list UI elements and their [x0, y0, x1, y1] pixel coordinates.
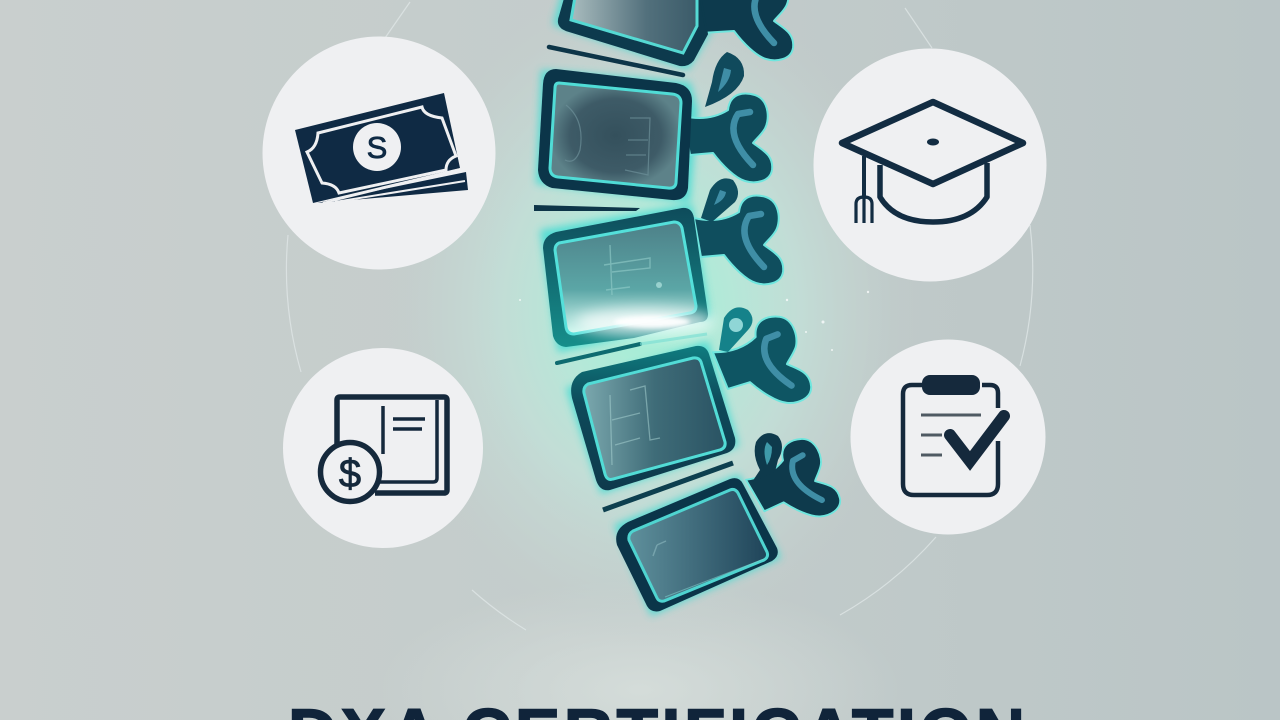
- bright flare: [575, 308, 715, 336]
- orbit ring: [286, 2, 1033, 630]
- vertebra 1: [559, 0, 707, 65]
- icon: book with coin: [320, 397, 447, 502]
- panel: education circle: [814, 48, 1046, 282]
- spine illustration: [519, 0, 869, 616]
- vertebra 4: [571, 346, 735, 490]
- disc line 2: [534, 205, 640, 211]
- drop 4: [719, 307, 752, 352]
- panel: budget book circle: [283, 348, 483, 548]
- vertebra process 5: [739, 432, 844, 537]
- vertebra 2: [538, 69, 692, 200]
- icon: book with coin: $: [339, 452, 361, 496]
- drop 3: [701, 178, 738, 222]
- panel: money circle: [262, 36, 496, 270]
- vertebra process 2: [683, 52, 772, 182]
- disc line 1: [549, 47, 683, 75]
- icon: clipboard with check: [903, 375, 1004, 495]
- drop 5: [752, 433, 782, 482]
- disc line 3: [557, 344, 640, 363]
- vertebra 3: [543, 208, 708, 347]
- vertebra 5: [616, 478, 778, 611]
- icon: banknote: S: [367, 130, 387, 165]
- icon: banknote: [295, 93, 468, 203]
- vertebra process 1: [693, 0, 793, 60]
- vertebra process 4: [708, 312, 814, 417]
- vertebra process 3: [694, 196, 783, 284]
- glow particles: [519, 291, 869, 351]
- panel: checklist circle: [850, 340, 1046, 534]
- disc line 4: [603, 463, 733, 510]
- icon: graduation cap: [842, 102, 1023, 223]
- spine glow: [536, 0, 781, 616]
